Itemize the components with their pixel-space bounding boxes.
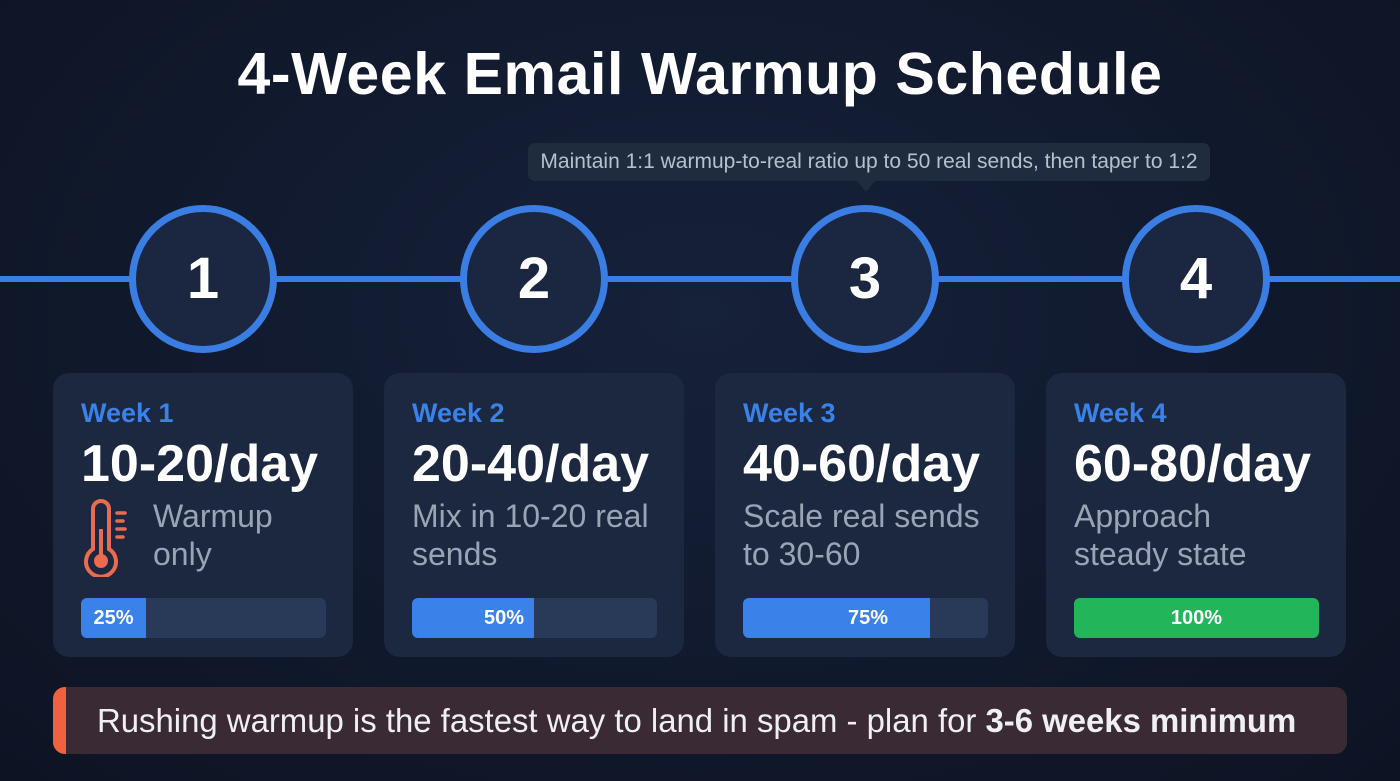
panel: week 4: Approach	[1074, 498, 1211, 534]
panel: week 2: sends	[412, 536, 497, 572]
step circle 4: 4	[1180, 246, 1212, 311]
timeline line	[0, 276, 1400, 282]
panel: week 1: Warmup	[153, 498, 273, 534]
panel: week 1: 10-20/day	[81, 435, 318, 493]
panel: week 3: Week 3	[743, 398, 836, 428]
panel: week 2: Mix in 10-20 real	[412, 498, 649, 534]
panel: week 4: steady state	[1074, 536, 1247, 572]
progress 50%: 50%	[484, 607, 524, 629]
progress 75%: 75%	[848, 607, 888, 629]
panel: week 3	[715, 373, 1015, 657]
panel: week 3: to 30-60	[743, 536, 860, 572]
progress 100%	[1074, 598, 1319, 638]
step circle 2: 2	[518, 246, 550, 311]
icon: thermometer	[84, 499, 127, 577]
step circle 4	[1122, 205, 1270, 353]
progress 100%: 100%	[1171, 607, 1222, 629]
progress 25%	[81, 598, 326, 638]
panel: week 1	[53, 373, 353, 657]
callout: ratio tip	[528, 143, 1210, 181]
step circle 3	[791, 205, 939, 353]
panel: week 2	[384, 373, 684, 657]
panel: week 3: 40-60/day	[743, 435, 980, 493]
panel: week 2: 20-40/day	[412, 435, 649, 493]
step circle 2	[460, 205, 608, 353]
step circle 3: 3	[849, 246, 881, 311]
panel: week 4	[1046, 373, 1346, 657]
callout: warning: Rushing warmup is the fastest way to land in spam - plan for 3-6 weeks minimum	[97, 702, 1296, 739]
panel: week 4: Week 4	[1074, 398, 1167, 428]
step circle 1	[129, 205, 277, 353]
progress 25%: 25%	[93, 607, 134, 629]
title: 4-Week Email Warmup Schedule	[237, 41, 1163, 107]
panel: week 2: Week 2	[412, 398, 505, 428]
step circle 1: 1	[187, 246, 219, 311]
progress 75%	[743, 598, 988, 638]
panel: week 1: Week 1	[81, 398, 174, 428]
panel: week 1: only	[153, 536, 212, 572]
progress 50%	[412, 598, 657, 638]
callout: warning	[53, 687, 1347, 754]
panel: week 3: Scale real sends	[743, 498, 980, 534]
panel: week 4: 60-80/day	[1074, 435, 1311, 493]
callout: ratio tip: Maintain 1:1 warmup-to-real ratio up to 50 real sends, then taper to 1:2	[540, 150, 1198, 173]
